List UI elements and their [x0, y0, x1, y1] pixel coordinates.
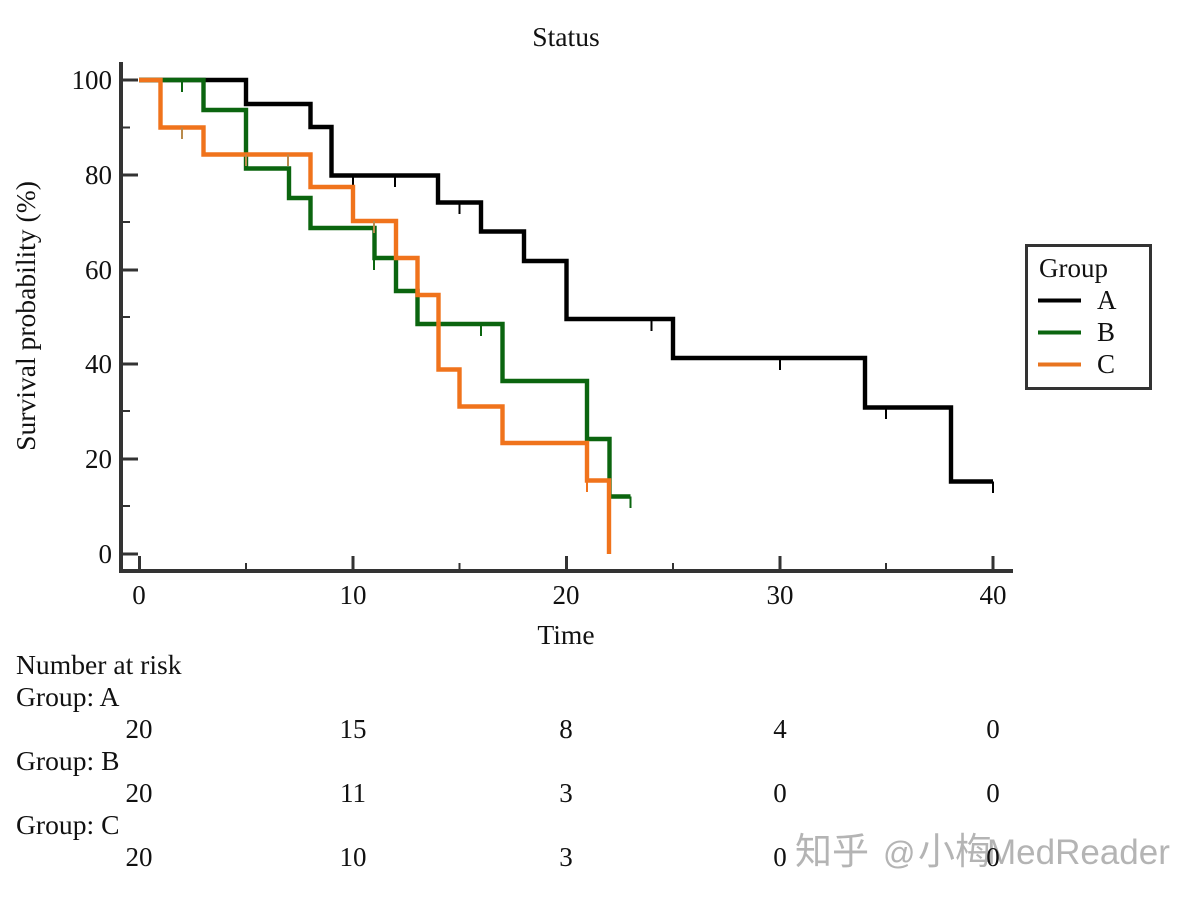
number at risk table: Group: B	[16, 745, 119, 776]
x axis: 0	[132, 580, 146, 610]
number at risk table: Number at risk	[16, 649, 182, 680]
x axis: 10	[340, 580, 366, 610]
y axis: 80	[85, 160, 112, 190]
number at risk table: Group: C	[16, 809, 119, 840]
legend entry B: B	[1097, 317, 1115, 347]
watermark: 知乎	[795, 831, 869, 872]
watermark: 小梅	[919, 832, 993, 873]
y axis	[72, 62, 138, 573]
number at risk table: 4	[773, 714, 787, 744]
number at risk table: 0	[986, 714, 1000, 744]
number at risk table: 20	[126, 714, 152, 744]
number at risk table: 0	[773, 842, 787, 872]
curve: group B	[139, 80, 630, 508]
legend entry A	[1038, 285, 1117, 315]
legend	[1026, 246, 1150, 388]
number at risk table: 15	[340, 714, 366, 744]
watermark: MedReader	[987, 833, 1170, 872]
curve: group C	[139, 80, 609, 554]
legend entry C: C	[1097, 349, 1115, 379]
watermark: @	[883, 835, 915, 871]
y axis: 60	[85, 255, 112, 285]
watermark: MedReader	[988, 834, 1171, 873]
number at risk table: 11	[340, 778, 366, 808]
x axis: 20	[552, 580, 580, 610]
legend entry A: A	[1097, 285, 1117, 315]
watermark: 小梅	[918, 831, 992, 872]
number at risk table: 0	[986, 778, 1000, 808]
x axis	[119, 556, 1013, 610]
watermark: 知乎	[796, 832, 870, 873]
number at risk table: Group: A	[16, 681, 120, 712]
title: Status	[532, 21, 600, 52]
legend entry C	[1038, 349, 1115, 379]
number at risk table: 20	[126, 778, 152, 808]
number at risk table: 20	[126, 842, 152, 872]
curve: group A	[139, 80, 993, 493]
y axis: 100	[72, 65, 112, 95]
number at risk table: 3	[559, 842, 573, 872]
number at risk table: 10	[340, 842, 366, 872]
number at risk table: 0	[986, 842, 1000, 872]
number at risk table: 3	[559, 778, 573, 808]
y axis: 40	[85, 349, 112, 379]
legend: Group	[1039, 253, 1108, 283]
number at risk table	[16, 649, 1000, 872]
watermark: @	[884, 836, 916, 872]
number at risk table: 8	[559, 714, 573, 744]
legend entry B	[1038, 317, 1115, 347]
x axis: 30	[766, 580, 794, 610]
y axis: 20	[85, 444, 112, 474]
x axis: 40	[980, 580, 1006, 610]
y axis: 0	[98, 539, 112, 569]
y axis label: Survival probability (%)	[10, 181, 41, 451]
watermark	[795, 831, 1171, 873]
number at risk table: 0	[773, 778, 787, 808]
x axis label: Time	[537, 619, 595, 650]
